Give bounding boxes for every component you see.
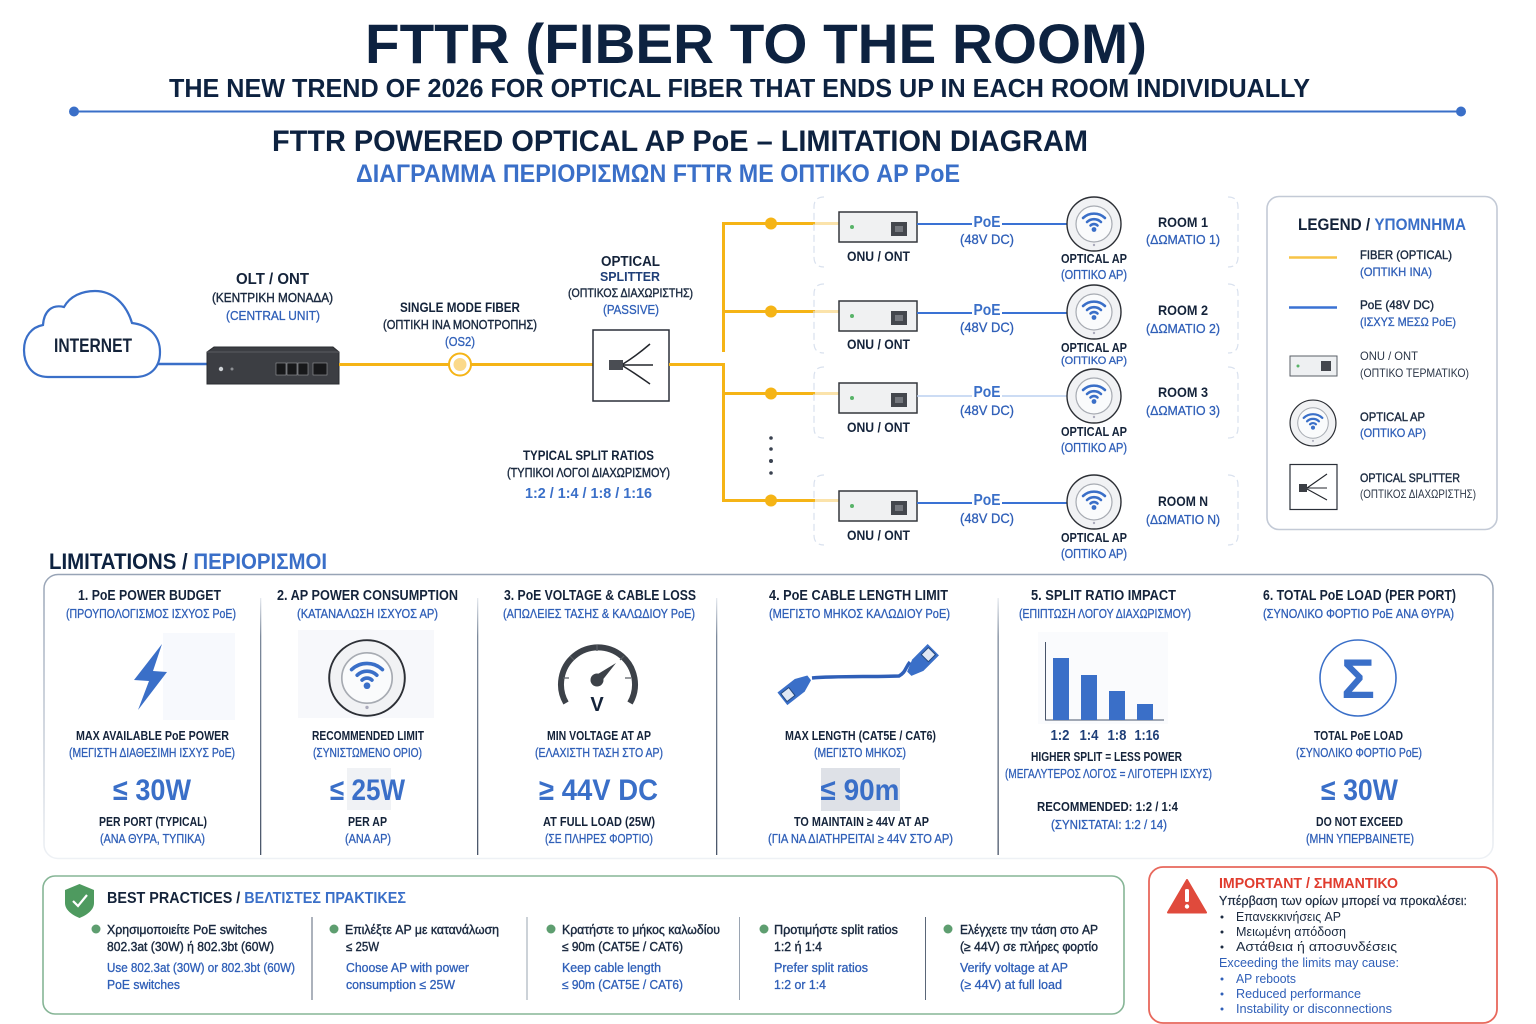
OLT label: (ΚΕΝΤΡΙΚΗ ΜΟΝΑΔΑ) [212, 291, 333, 305]
legend: AP: (ΟΠΤΙΚΟ ΑΡ) [1360, 426, 1426, 440]
limit 3: voltage and cable loss: AT FULL LOAD (25W) [543, 815, 655, 829]
icon: voltmeter gauge: V [590, 694, 604, 716]
practice 3: ≤ 90m (CAT5E / CAT6) [562, 978, 683, 992]
room N row: (ΟΠΤΙΚΟ ΑΡ) [1061, 547, 1127, 561]
practice 3: Κρατήστε το μήκος καλωδίου [562, 923, 720, 937]
split ratios text [507, 448, 670, 502]
important heading: IMPORTANT / ΣΗΜΑΝΤΙΚΟ [1219, 876, 1398, 892]
practice 1: Use 802.3at (30W) or 802.3bt (60W) [107, 961, 295, 975]
panel: important warning [1149, 867, 1497, 1023]
bar chart: split ratios: 1:8 [1108, 727, 1126, 744]
important english list [1219, 956, 1399, 1016]
panel: limitations frame [44, 574, 1493, 858]
room 1 row: ROOM 1 [1158, 214, 1208, 230]
practice 2: ≤ 25W [346, 940, 379, 954]
subtitle: THE NEW TREND OF 2026 FOR OPTICAL FIBER THAT ENDS UP IN EACH ROOM INDIVIDUALLY [169, 73, 1310, 103]
limit 4: cable length [768, 588, 953, 846]
legend: PoE [1289, 298, 1456, 329]
room 3 row: PoE [974, 384, 1001, 401]
panel: legend [1267, 196, 1497, 530]
bar chart: split ratios [1038, 632, 1168, 744]
limit 4: cable length: (ΜΕΓΙΣΤΟ ΜΗΚΟΣ) [814, 746, 906, 760]
practice 4 [740, 917, 898, 1000]
diagram heading greek: ΔΙΑΓΡΑΜΜΑ ΠΕΡΙΟΡΙΣΜΩΝ FTTR ΜΕ ΟΠΤΙΚΟ AP PoE [356, 160, 960, 188]
limit 4: cable length: MAX LENGTH (CAT5E / CAT6) [785, 729, 936, 743]
legend: fiber: FIBER (OPTICAL) [1360, 248, 1452, 262]
split ratios text: TYPICAL SPLIT RATIOS [523, 448, 654, 463]
practice 2: Choose AP with power [346, 961, 469, 975]
practice 5: (≥ 44V) at full load [960, 978, 1062, 992]
limit 4: cable length: (ΜΕΓΙΣΤΟ ΜΗΚΟΣ ΚΑΛΩΔΙΟΥ PoE) [769, 607, 950, 621]
fiber label: (ΟΠΤΙΚΗ ΙΝΑ ΜΟΝΟΤΡΟΠΗΣ) [383, 318, 537, 332]
splitter label: OPTICAL [601, 254, 660, 270]
limit 1: PoE power budget: MAX AVAILABLE PoE POWER [76, 729, 229, 743]
icon: voltmeter gauge [561, 645, 635, 716]
limit 6: total PoE load: 6. TOTAL PoE LOAD (PER PORT) [1263, 588, 1456, 604]
practice 1: Χρησιμοποιείτε PoE switches [107, 923, 267, 937]
room 2 row: (48V DC) [960, 319, 1014, 335]
room 2 row: PoE [974, 302, 1001, 319]
limit 5: split ratio impact [1005, 588, 1212, 832]
limit 1: PoE power budget: (ΑΝΑ ΘΥΡΑ, ΤΥΠΙΚΑ) [100, 832, 205, 846]
practice 2 [312, 917, 499, 1000]
room 2 row: OPTICAL AP [1061, 340, 1127, 355]
icon: lightning bolt [134, 644, 167, 710]
practice 3: ≤ 90m (CAT5E / CAT6) [562, 940, 683, 954]
limit 6: total PoE load: (ΣΥΝΟΛΙΚΟ ΦΟΡΤΙΟ PoE ΑΝΑ ΘΥΡΑ) [1263, 607, 1454, 621]
limit 2: AP power consumption: 2. AP POWER CONSUMPTION [277, 588, 458, 604]
limit 4: cable length: ≤ 90m [820, 774, 900, 807]
limitations heading: LIMITATIONS / ΠΕΡΙΟΡΙΣΜΟΙ [49, 549, 327, 574]
icon: internet cloud: INTERNET [54, 336, 132, 357]
limit 3: voltage and cable loss: ≥ 44V DC [539, 774, 658, 807]
room N row [765, 475, 1238, 561]
room 3 row: (48V DC) [960, 402, 1014, 418]
limit 1: PoE power budget: PER PORT (TYPICAL) [99, 815, 207, 829]
limit 3: voltage and cable loss: (ΕΛΑΧΙΣΤΗ ΤΑΣΗ ΣΤΟ ΑΡ) [535, 746, 663, 760]
splitter label [568, 254, 693, 317]
limit 2: AP power consumption: PER AP [348, 815, 387, 829]
legend: splitter [1290, 464, 1476, 510]
important english list: AP reboots [1236, 972, 1296, 986]
limit 2: AP power consumption: (ΣΥΝΙΣΤΩΜΕΝΟ ΟΡΙΟ) [313, 746, 422, 760]
limit 6: total PoE load: DO NOT EXCEED [1316, 815, 1403, 829]
room 3 row [765, 367, 1238, 455]
room 3 row: ROOM 3 [1158, 384, 1208, 400]
icon: sigma: Σ [1341, 647, 1375, 710]
legend: AP [1290, 400, 1426, 446]
limit 6: total PoE load: (ΣΥΝΟΛΙΚΟ ΦΟΡΤΙΟ PoE) [1296, 746, 1422, 760]
split ratios text: 1:2 / 1:4 / 1:8 / 1:16 [525, 485, 652, 502]
OLT label: OLT / ONT [236, 271, 309, 288]
room N row: PoE [974, 492, 1001, 509]
legend: PoE: (ΙΣΧΥΣ ΜΕΣΩ PoE) [1360, 315, 1456, 329]
practice 5: (≥ 44V) σε πλήρες φορτίο [960, 940, 1098, 954]
important greek list: Υπέρβαση των ορίων μπορεί να προκαλέσει: [1219, 894, 1467, 908]
important greek list: Αστάθεια ή αποσυνδέσεις [1236, 940, 1397, 954]
icon: internet cloud [24, 291, 160, 377]
best practices heading: BEST PRACTICES / ΒΕΛΤΙΣΤΕΣ ΠΡΑΚΤΙΚΕΣ [107, 890, 406, 907]
limit 2: AP power consumption: ≤ 25W [330, 774, 406, 807]
practice 5 [926, 917, 1098, 1000]
limit 2: AP power consumption: RECOMMENDED LIMIT [312, 729, 424, 743]
practice 5: Verify voltage at AP [960, 961, 1068, 975]
limit 4: cable length: (ΓΙΑ ΝΑ ΔΙΑΤΗΡΕΙΤΑΙ ≥ 44V ΣΤΟ ΑΡ) [768, 832, 953, 846]
limit 5: split ratio impact: 5. SPLIT RATIO IMPACT [1031, 588, 1176, 604]
important greek list [1219, 894, 1467, 954]
splitter label: (ΟΠΤΙΚΟΣ ΔΙΑΧΩΡΙΣΤΗΣ) [568, 286, 693, 300]
practice 4: Προτιμήστε split ratios [774, 923, 898, 937]
limit 1: PoE power budget: (ΜΕΓΙΣΤΗ ΔΙΑΘΕΣΙΜΗ ΙΣΧΥΣ PoE) [69, 746, 235, 760]
legend: PoE: PoE (48V DC) [1360, 298, 1434, 312]
practice 1 [92, 923, 295, 992]
internet link line [158, 363, 208, 365]
fiber label [383, 300, 537, 349]
fiber trunk and branches [669, 224, 816, 500]
icon: sigma [1320, 640, 1396, 716]
room 3 row: OPTICAL AP [1061, 424, 1127, 439]
fiber label: SINGLE MODE FIBER [400, 300, 520, 315]
fiber line to splitter [339, 363, 593, 366]
room 2 row [765, 284, 1238, 367]
room 3 row: ONU / ONT [847, 419, 910, 435]
room N row: ONU / ONT [847, 527, 910, 543]
legend: ONU: (ΟΠΤΙΚΟ ΤΕΡΜΑΤΙΚΟ) [1360, 366, 1469, 380]
room 3 row: (ΟΠΤΙΚΟ ΑΡ) [1061, 441, 1127, 455]
room 2 row: ROOM 2 [1158, 302, 1208, 318]
title: FTTR (FIBER TO THE ROOM) [365, 12, 1147, 75]
limit 2: AP power consumption [277, 588, 458, 846]
limit 5: split ratio impact: (ΣΥΝΙΣΤΑΤΑΙ: 1:2 / 14) [1051, 818, 1167, 832]
icon: warning triangle [1168, 880, 1206, 912]
limit 6: total PoE load [1263, 588, 1456, 846]
room 1 row: OPTICAL AP [1061, 251, 1127, 266]
important english list: Exceeding the limits may cause: [1219, 956, 1399, 970]
limit 4: cable length: TO MAINTAIN ≥ 44V AT AP [794, 815, 929, 829]
header divider [69, 106, 1466, 116]
practice 3 [527, 917, 720, 1000]
legend: ONU: ONU / ONT [1360, 349, 1419, 363]
practice 1: 802.3at (30W) ή 802.3bt (60W) [107, 940, 274, 954]
room 2 row: (ΟΠΤΙΚΟ ΑΡ) [1061, 355, 1127, 367]
practice 4: 1:2 ή 1:4 [774, 940, 822, 954]
splitter label: SPLITTER [600, 270, 660, 284]
room 3 row: (ΔΩΜΑΤΙΟ 3) [1146, 403, 1220, 418]
fiber label: (OS2) [445, 334, 475, 349]
room 1 row: (ΟΠΤΙΚΟ ΑΡ) [1061, 268, 1127, 282]
column dividers [260, 598, 999, 855]
important english list: Instability or disconnections [1236, 1002, 1392, 1016]
icon: ethernet cable [777, 644, 939, 705]
bar chart: split ratios: 1:2 [1050, 727, 1070, 744]
legend heading: LEGEND / ΥΠΟΜΝΗΜΑ [1298, 215, 1466, 234]
important greek list: Επανεκκινήσεις AP [1236, 910, 1341, 924]
icon: access point [329, 640, 405, 716]
room 1 row: PoE [974, 214, 1001, 231]
icon: OLT device [207, 347, 339, 384]
room N row: ROOM N [1158, 493, 1208, 509]
practice 5: Ελέγχετε την τάση στο AP [960, 923, 1098, 937]
limit 3: voltage and cable loss: (ΑΠΩΛΕΙΕΣ ΤΑΣΗΣ & ΚΑΛΩΔΙΟΥ PoE) [503, 607, 695, 621]
important greek list: Μειωμένη απόδοση [1236, 925, 1346, 939]
room 1 row: (48V DC) [960, 231, 1014, 247]
panel: best practices [43, 876, 1124, 1014]
room 1 row: (ΔΩΜΑΤΙΟ 1) [1146, 232, 1220, 247]
bar chart: split ratios: 1:4 [1080, 727, 1099, 744]
room 2 row: ONU / ONT [847, 336, 910, 352]
limit 5: split ratio impact: (ΜΕΓΑΛΥΤΕΡΟΣ ΛΟΓΟΣ = ΛΙΓΟΤΕΡΗ ΙΣΧΥΣ) [1005, 767, 1212, 781]
legend: splitter: OPTICAL SPLITTER [1360, 471, 1460, 485]
limit 3: voltage and cable loss: 3. PoE VOLTAGE & CABLE LOSS [504, 588, 696, 604]
limit 6: total PoE load: TOTAL PoE LOAD [1314, 729, 1403, 743]
split ratios text: (ΤΥΠΙΚΟΙ ΛΟΓΟΙ ΔΙΑΧΩΡΙΣΜΟΥ) [507, 466, 670, 480]
OLT label: (CENTRAL UNIT) [226, 308, 320, 323]
practice 1: PoE switches [107, 978, 180, 992]
room N row: OPTICAL AP [1061, 530, 1127, 545]
bar chart: split ratios: 1:16 [1134, 727, 1160, 744]
room 1 row [765, 197, 1238, 282]
legend: AP: OPTICAL AP [1360, 410, 1425, 424]
room 2 row: (ΔΩΜΑΤΙΟ 2) [1146, 321, 1220, 336]
limit 5: split ratio impact: (ΕΠΙΠΤΩΣΗ ΛΟΓΟΥ ΔΙΑΧΩΡΙΣΜΟΥ) [1019, 607, 1191, 621]
limit 3: voltage and cable loss [503, 588, 696, 846]
limit 3: voltage and cable loss: MIN VOLTAGE AT AP [547, 729, 651, 743]
legend: fiber [1289, 248, 1452, 279]
practice 4: 1:2 or 1:4 [774, 978, 826, 992]
icon: shield check [65, 884, 94, 918]
legend: fiber: (ΟΠΤΙΚΗ ΙΝΑ) [1360, 265, 1432, 279]
room 1 row: ONU / ONT [847, 248, 910, 264]
limit 5: split ratio impact: HIGHER SPLIT = LESS POWER [1031, 750, 1182, 764]
OLT label [212, 271, 333, 323]
limit 6: total PoE load: ≤ 30W [1321, 774, 1399, 807]
icon: fiber connector [449, 354, 471, 376]
practice 3: Keep cable length [562, 961, 661, 975]
limit 1: PoE power budget: 1. PoE POWER BUDGET [78, 588, 221, 604]
practice 2: Επιλέξτε AP με κατανάλωση [345, 923, 499, 937]
limit 3: voltage and cable loss: (ΣΕ ΠΛΗΡΕΣ ΦΟΡΤΙΟ) [545, 832, 653, 846]
room N row: (ΔΩΜΑΤΙΟ Ν) [1146, 512, 1220, 527]
diagram heading: FTTR POWERED OPTICAL AP PoE – LIMITATION DIAGRAM [272, 125, 1088, 158]
practice 2: consumption ≤ 25W [346, 978, 455, 992]
limit 1: PoE power budget [66, 588, 236, 846]
legend: splitter: (ΟΠΤΙΚΟΣ ΔΙΑΧΩΡΙΣΤΗΣ) [1360, 487, 1476, 501]
practice 4: Prefer split ratios [774, 961, 868, 975]
legend: ONU [1290, 349, 1469, 380]
important english list: Reduced performance [1236, 987, 1361, 1001]
icon: optical splitter [593, 330, 669, 401]
limit 4: cable length: 4. PoE CABLE LENGTH LIMIT [769, 588, 948, 604]
limit 1: PoE power budget: (ΠΡΟΥΠΟΛΟΓΙΣΜΟΣ ΙΣΧΥΟΣ PoE) [66, 607, 236, 621]
continuation dots [769, 436, 773, 475]
limit 1: PoE power budget: ≤ 30W [113, 774, 192, 807]
limit 5: split ratio impact: RECOMMENDED: 1:2 / 1:4 [1037, 800, 1178, 814]
limit 2: AP power consumption: (ΚΑΤΑΝΑΛΩΣΗ ΙΣΧΥΟΣ ΑΡ) [297, 607, 438, 621]
limit 2: AP power consumption: (ΑΝΑ ΑΡ) [345, 832, 391, 846]
limit 6: total PoE load: (ΜΗΝ ΥΠΕΡΒΑΙΝΕΤΕ) [1306, 832, 1414, 846]
room N row: (48V DC) [960, 510, 1014, 526]
splitter label: (PASSIVE) [603, 302, 659, 317]
